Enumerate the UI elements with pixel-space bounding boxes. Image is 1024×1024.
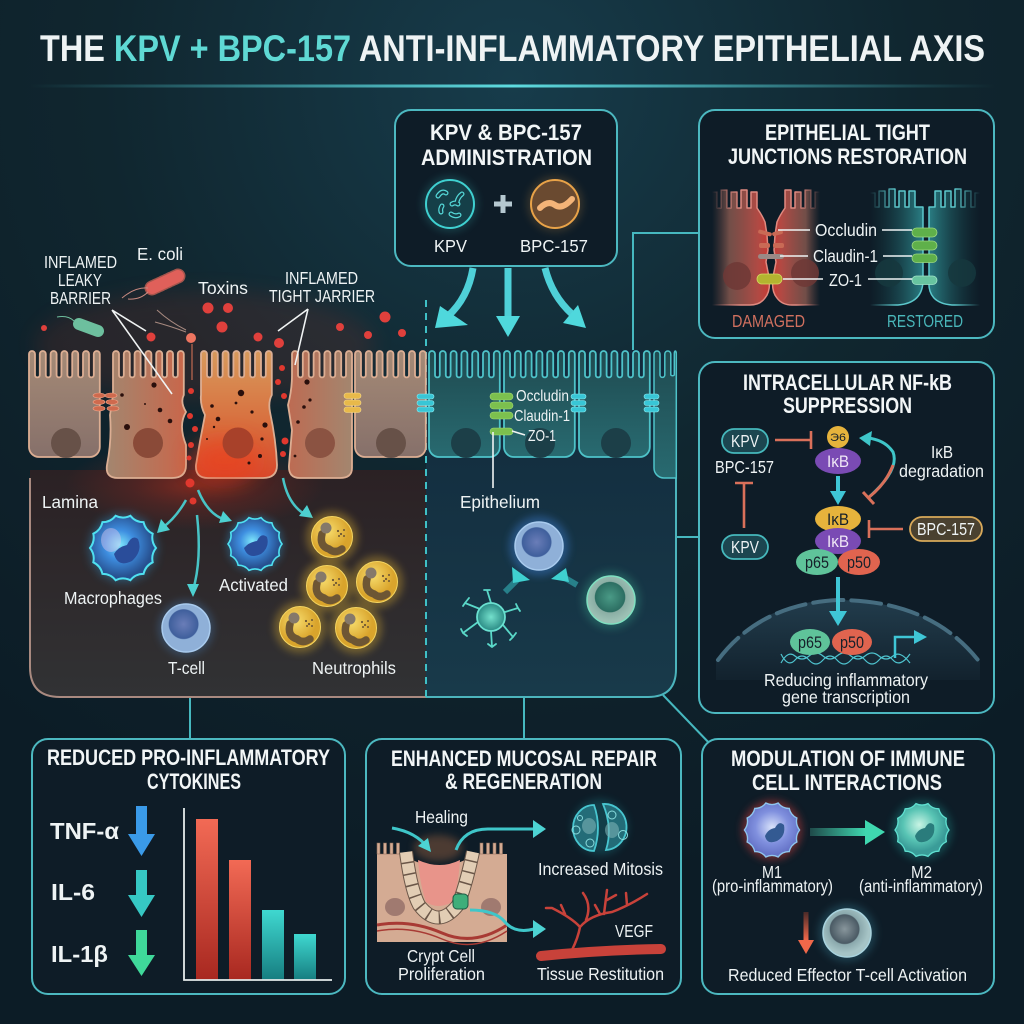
label: ZO-1: ZO-1 [528, 428, 556, 445]
label: tissue restitution: Tissue Restitution [537, 964, 664, 984]
arrows from barrier into lamina [162, 478, 306, 590]
damaged cells [712, 190, 820, 305]
inflamed glow above barrier [35, 290, 375, 400]
restored cell 4 [654, 351, 676, 478]
KPV pill top [722, 429, 768, 453]
inhibitor from KPV [775, 431, 811, 449]
inhibitor from BPC-157 [869, 520, 903, 538]
label: IL-6: IL-6 [51, 879, 95, 905]
nuclei [51, 428, 406, 458]
damaged junctions [757, 229, 784, 284]
restored left cell [870, 189, 923, 305]
restored junctions [912, 228, 937, 284]
label: M2 [859, 862, 983, 896]
icon: macrophage [88, 513, 158, 583]
restored cells [870, 189, 980, 305]
label: crypt cell proliferation: Crypt Cell [407, 946, 475, 966]
label: inflamed leaky barrier: INFLAMED [44, 252, 117, 272]
arrows from administration to barrier [435, 268, 586, 337]
restored cell 1 [429, 351, 500, 457]
heading: JUNCTIONS RESTORATION [728, 144, 967, 169]
lamina left border [30, 478, 426, 697]
crypt wall [406, 852, 473, 918]
panel: NF-kB suppression [699, 362, 994, 713]
label: activated: Activated [219, 575, 288, 595]
heading: EPITHELIAL TIGHT [765, 120, 930, 145]
cell 3 highly inflamed [196, 351, 277, 478]
label: epithelium: Epithelium [460, 492, 540, 512]
arrow: down red [798, 912, 814, 954]
left epithelial cells [29, 351, 426, 478]
plus sign [494, 195, 512, 213]
panel: administration [395, 110, 617, 266]
pointer lines [112, 309, 525, 488]
restored nuclei [875, 259, 976, 287]
right epithelial cells [429, 351, 676, 478]
DNA strand [781, 653, 910, 664]
label: inflamed tight jarrier: TIGHT JARRIER [269, 286, 375, 306]
lamina right border [426, 478, 676, 697]
IkB purple top [815, 448, 861, 474]
label: IkB degradation: IκB [931, 442, 953, 462]
label: crypt cell proliferation: Proliferation [398, 964, 485, 984]
free toxins [41, 302, 406, 348]
damaged left outline [712, 190, 769, 305]
damaged tight junction [93, 393, 119, 411]
icon: M1 macrophage [742, 800, 802, 860]
label: inflamed tight jarrier: INFLAMED [285, 268, 358, 288]
transcription arrow [895, 630, 927, 658]
leaking toxins between cells [186, 365, 288, 504]
label: restored: RESTORED [887, 311, 963, 331]
nuclei [385, 898, 405, 916]
icon: dendritic cell [461, 590, 520, 647]
heading: ENHANCED MUCOSAL REPAIR [391, 746, 657, 771]
phospho marker: Э6 [830, 432, 846, 444]
arrows [392, 820, 546, 938]
restored right outline [929, 189, 980, 305]
icon: T-cell [818, 904, 876, 962]
label: occludin: Occludin [516, 388, 569, 405]
heading: ADMINISTRATION [421, 145, 592, 170]
red glow over cell interiors [191, 438, 259, 482]
icon: green bacterium [57, 316, 98, 331]
label: M1 [712, 862, 833, 896]
label: M2: (anti-inflammatory) [859, 876, 983, 896]
label: crypt cell proliferation [398, 946, 485, 984]
label: occludin: Occludin [815, 220, 877, 240]
arrow down [830, 476, 846, 505]
restored cell 3 [579, 351, 650, 457]
green tight junction [490, 393, 513, 435]
cell 1 [29, 351, 100, 457]
p65 p50 in nucleus [790, 629, 872, 655]
label: inflamed tight jarrier [269, 268, 375, 306]
divider [425, 300, 427, 697]
icon: M2 macrophage [892, 800, 952, 860]
arrow: IL-6 down [128, 870, 155, 917]
label: M1: (pro-inflammatory) [712, 876, 833, 896]
cell 2 inflamed [107, 351, 186, 478]
icon: BPC-157 [527, 176, 583, 232]
icon: green immune cell [582, 571, 640, 629]
teal tight junctions [417, 394, 659, 412]
restored right cell [929, 189, 980, 305]
label: neutrophils: Neutrophils [312, 658, 396, 678]
KPV pill top: KPV [731, 431, 759, 451]
heading: KPV & BPC-157 [430, 120, 582, 145]
label: BPC-157: BPC-157 [520, 236, 588, 256]
damaged right outline [773, 190, 820, 305]
IkB complex: IκB [827, 510, 849, 529]
heading: REDUCED PRO-INFLAMMATORY [47, 745, 330, 770]
heading [391, 746, 657, 794]
icon: invading bacterium [155, 310, 196, 380]
panel: immune modulation [702, 739, 994, 994]
heading: INTRACELLULAR NF-kB [743, 370, 952, 395]
bar chart [184, 808, 332, 980]
heading [728, 120, 967, 169]
lamina left region [30, 470, 426, 697]
p65 p50 in nucleus: p50 [840, 633, 864, 652]
label: increased mitosis: Increased Mitosis [538, 859, 663, 879]
panel: tight junctions restoration [699, 110, 994, 338]
label: claudin-1: Claudin-1 [514, 408, 570, 425]
icon: T-cell [158, 600, 214, 656]
icon: E. coli bacterium [122, 276, 178, 299]
heading: CELL INTERACTIONS [752, 770, 942, 795]
icon: neutrophil cluster [274, 511, 403, 654]
label: KPV: KPV [434, 236, 467, 256]
heading [743, 370, 952, 418]
intracellular damage dots [120, 379, 312, 464]
label: E. coli: E. coli [137, 244, 183, 264]
icon: KPV [422, 176, 478, 232]
label: VEGF: VEGF [615, 921, 653, 941]
icon: mitosis [572, 799, 628, 855]
arrow: TNF down [128, 806, 155, 856]
blood vessel band [377, 923, 507, 938]
panel: main epithelial diagram [29, 244, 676, 697]
IkB complex: p65 [805, 553, 829, 572]
label: inflamed leaky barrier: LEAKY [58, 270, 102, 290]
label: inflamed leaky barrier [44, 252, 117, 308]
label: reducing transcription: Reducing inflammatory [764, 670, 928, 690]
panel: reduced cytokines [32, 739, 345, 994]
label: reduced effector T-cell activation: Reduced Effector T-cell Activation [728, 965, 967, 985]
heading: MODULATION OF IMMUNE [731, 746, 965, 771]
label: M1: M1 [762, 862, 782, 882]
icon: blood vessel [541, 890, 661, 956]
arrow: IL-1 down [128, 930, 155, 976]
label: reducing transcription [764, 670, 928, 707]
top villi [377, 843, 502, 854]
yellow tight junction [344, 393, 361, 412]
crypt wall cells [406, 852, 473, 918]
icon: restored blue immune cell [509, 516, 569, 576]
icon: activated macrophage [226, 515, 284, 573]
heading: & REGENERATION [445, 769, 602, 794]
IkB complex: p50 [847, 553, 871, 572]
cell 4 inflamed [288, 351, 352, 478]
label: ZO-1: ZO-1 [829, 270, 862, 290]
label: BPC-157: BPC-157 [715, 457, 774, 477]
label: T-cell: T-cell [168, 658, 205, 678]
p65 p50 in nucleus: p65 [798, 633, 822, 652]
IkB purple top: IκB [827, 452, 849, 471]
label: TNF-alpha: TNF-α [50, 818, 119, 844]
label: toxins: Toxins [198, 278, 248, 298]
lamina right region [426, 350, 676, 697]
KPV pill lower: KPV [731, 537, 759, 557]
label: healing: Healing [415, 807, 468, 827]
damaged nuclei [723, 259, 819, 290]
arrow: M1 to M2 [810, 820, 885, 845]
arrow to nucleus [829, 577, 847, 626]
phospho marker [827, 426, 849, 448]
label: reducing transcription: gene transcription [782, 687, 910, 707]
heading [47, 745, 330, 794]
restored left outline [870, 189, 923, 305]
label: M2: M2 [911, 862, 932, 882]
heading: CYTOKINES [147, 769, 241, 794]
tissue block [377, 854, 507, 942]
red inflammation glow [65, 440, 325, 530]
label: damaged: DAMAGED [732, 311, 805, 331]
label: claudin-1: Claudin-1 [813, 246, 878, 266]
restored nuclei [451, 428, 631, 458]
damaged left cell [712, 190, 769, 305]
inhibitor from lower KPV [735, 483, 753, 528]
crypt lumen [418, 860, 460, 906]
heading [731, 746, 965, 795]
connector lines [190, 233, 712, 746]
label: IL-1 beta: IL-1β [51, 941, 108, 967]
heading [421, 120, 592, 170]
cell 5 [355, 351, 426, 457]
label: lamina: Lamina [42, 492, 98, 512]
restored cell 2 [504, 351, 575, 457]
label: inflamed leaky barrier: BARRIER [50, 288, 111, 308]
damaged right cell [773, 190, 820, 305]
BPC-157 pill: BPC-157 [917, 519, 975, 539]
heading: SUPPRESSION [783, 393, 912, 418]
small arrows between immune cells [505, 567, 577, 592]
panel: mucosal repair [366, 739, 681, 994]
IkB complex: IκB [827, 532, 849, 551]
IkB complex [796, 506, 880, 575]
label: macrophages: Macrophages [64, 588, 162, 608]
KPV pill lower [722, 535, 768, 559]
nucleus [716, 600, 980, 680]
proliferating cell [453, 894, 468, 909]
connector lines [778, 230, 912, 279]
IkB degradation arc [859, 431, 894, 504]
crypt glow [414, 835, 462, 861]
label: IkB degradation [899, 442, 984, 481]
label: IkB degradation: degradation [899, 461, 984, 481]
crypt illustration [377, 835, 507, 944]
